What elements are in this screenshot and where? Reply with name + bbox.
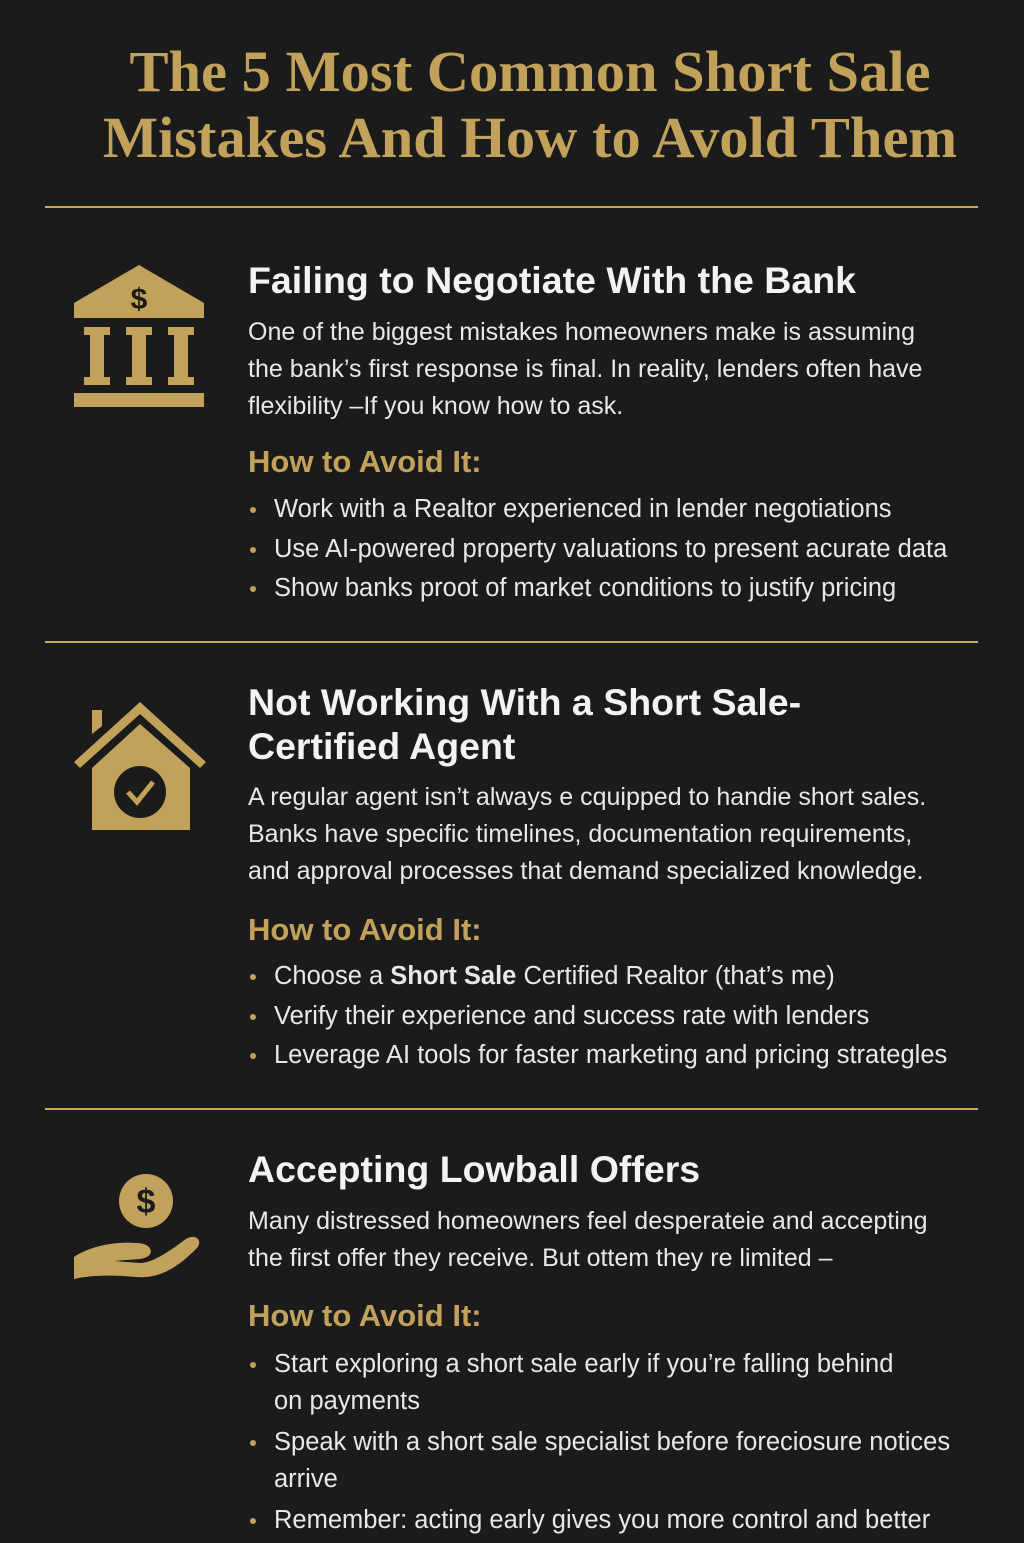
section 2 (74, 681, 947, 1069)
text (248, 782, 926, 884)
bullets: Remember: acting early gives you more control and better (274, 1506, 930, 1534)
section 1 (74, 259, 948, 602)
title (103, 39, 957, 170)
icon: bank (74, 265, 204, 407)
bullets: Verify their experience and success rate with lenders (274, 1002, 869, 1030)
heading: Failing to Negotiate With the Bank (248, 259, 856, 301)
heading: Certified Agent (248, 725, 515, 767)
heading (248, 681, 801, 767)
bullets (250, 962, 947, 1069)
title: The 5 Most Common Short Sale (129, 39, 931, 104)
section 3 (74, 1148, 950, 1534)
subheading: How to Avoid It: (248, 912, 482, 947)
icon: house check (74, 702, 206, 830)
text (248, 318, 922, 420)
text: the bank’s first response is final. In reality, lenders often have (248, 354, 922, 382)
bullets: Choose a Short Sale Certified Realtor (that’s me) (274, 962, 835, 990)
text: Many distressed homeowners feel desperateie and accepting (248, 1206, 928, 1234)
bullets (250, 1350, 950, 1534)
bullets: Leverage AI tools for faster marketing and pricing strategles (274, 1041, 947, 1069)
bullets: Speak with a short sale specialist before foreciosure notices (274, 1428, 950, 1456)
heading: Accepting Lowball Offers (248, 1148, 700, 1190)
text: Banks have specific timelines, documentation requirements, (248, 820, 912, 848)
bullets: Start exploring a short sale early if you’re falling behind (274, 1350, 893, 1378)
bullets (250, 495, 948, 602)
text: One of the biggest mistakes homeowners make is assuming (248, 318, 915, 346)
title: Mistakes And How to Avold Them (103, 105, 957, 170)
text: the first offer they receive. But ottem they re limited – (248, 1244, 833, 1272)
subheading: How to Avoid It: (248, 1298, 482, 1333)
text: A regular agent isn’t always e cquipped to handie short sales. (248, 782, 926, 810)
text: flexibility –If you know how to ask. (248, 392, 623, 420)
text (248, 1206, 928, 1272)
bullets: Show banks proot of market conditions to justify pricing (274, 574, 896, 602)
icon: hand with coin: $ (137, 1183, 156, 1221)
bullets: arrive (274, 1464, 338, 1492)
bullets: Work with a Realtor experienced in lender negotiations (274, 495, 892, 523)
icon: hand with coin (74, 1174, 200, 1279)
bullets: Use AI-powered property valuations to present acurate data (274, 534, 947, 562)
icon: bank: $ (131, 283, 148, 316)
heading: Not Working With a Short Sale- (248, 681, 801, 723)
text: and approval processes that demand specialized knowledge. (248, 856, 923, 884)
subheading: How to Avoid It: (248, 444, 482, 479)
bullets: on payments (274, 1386, 420, 1414)
